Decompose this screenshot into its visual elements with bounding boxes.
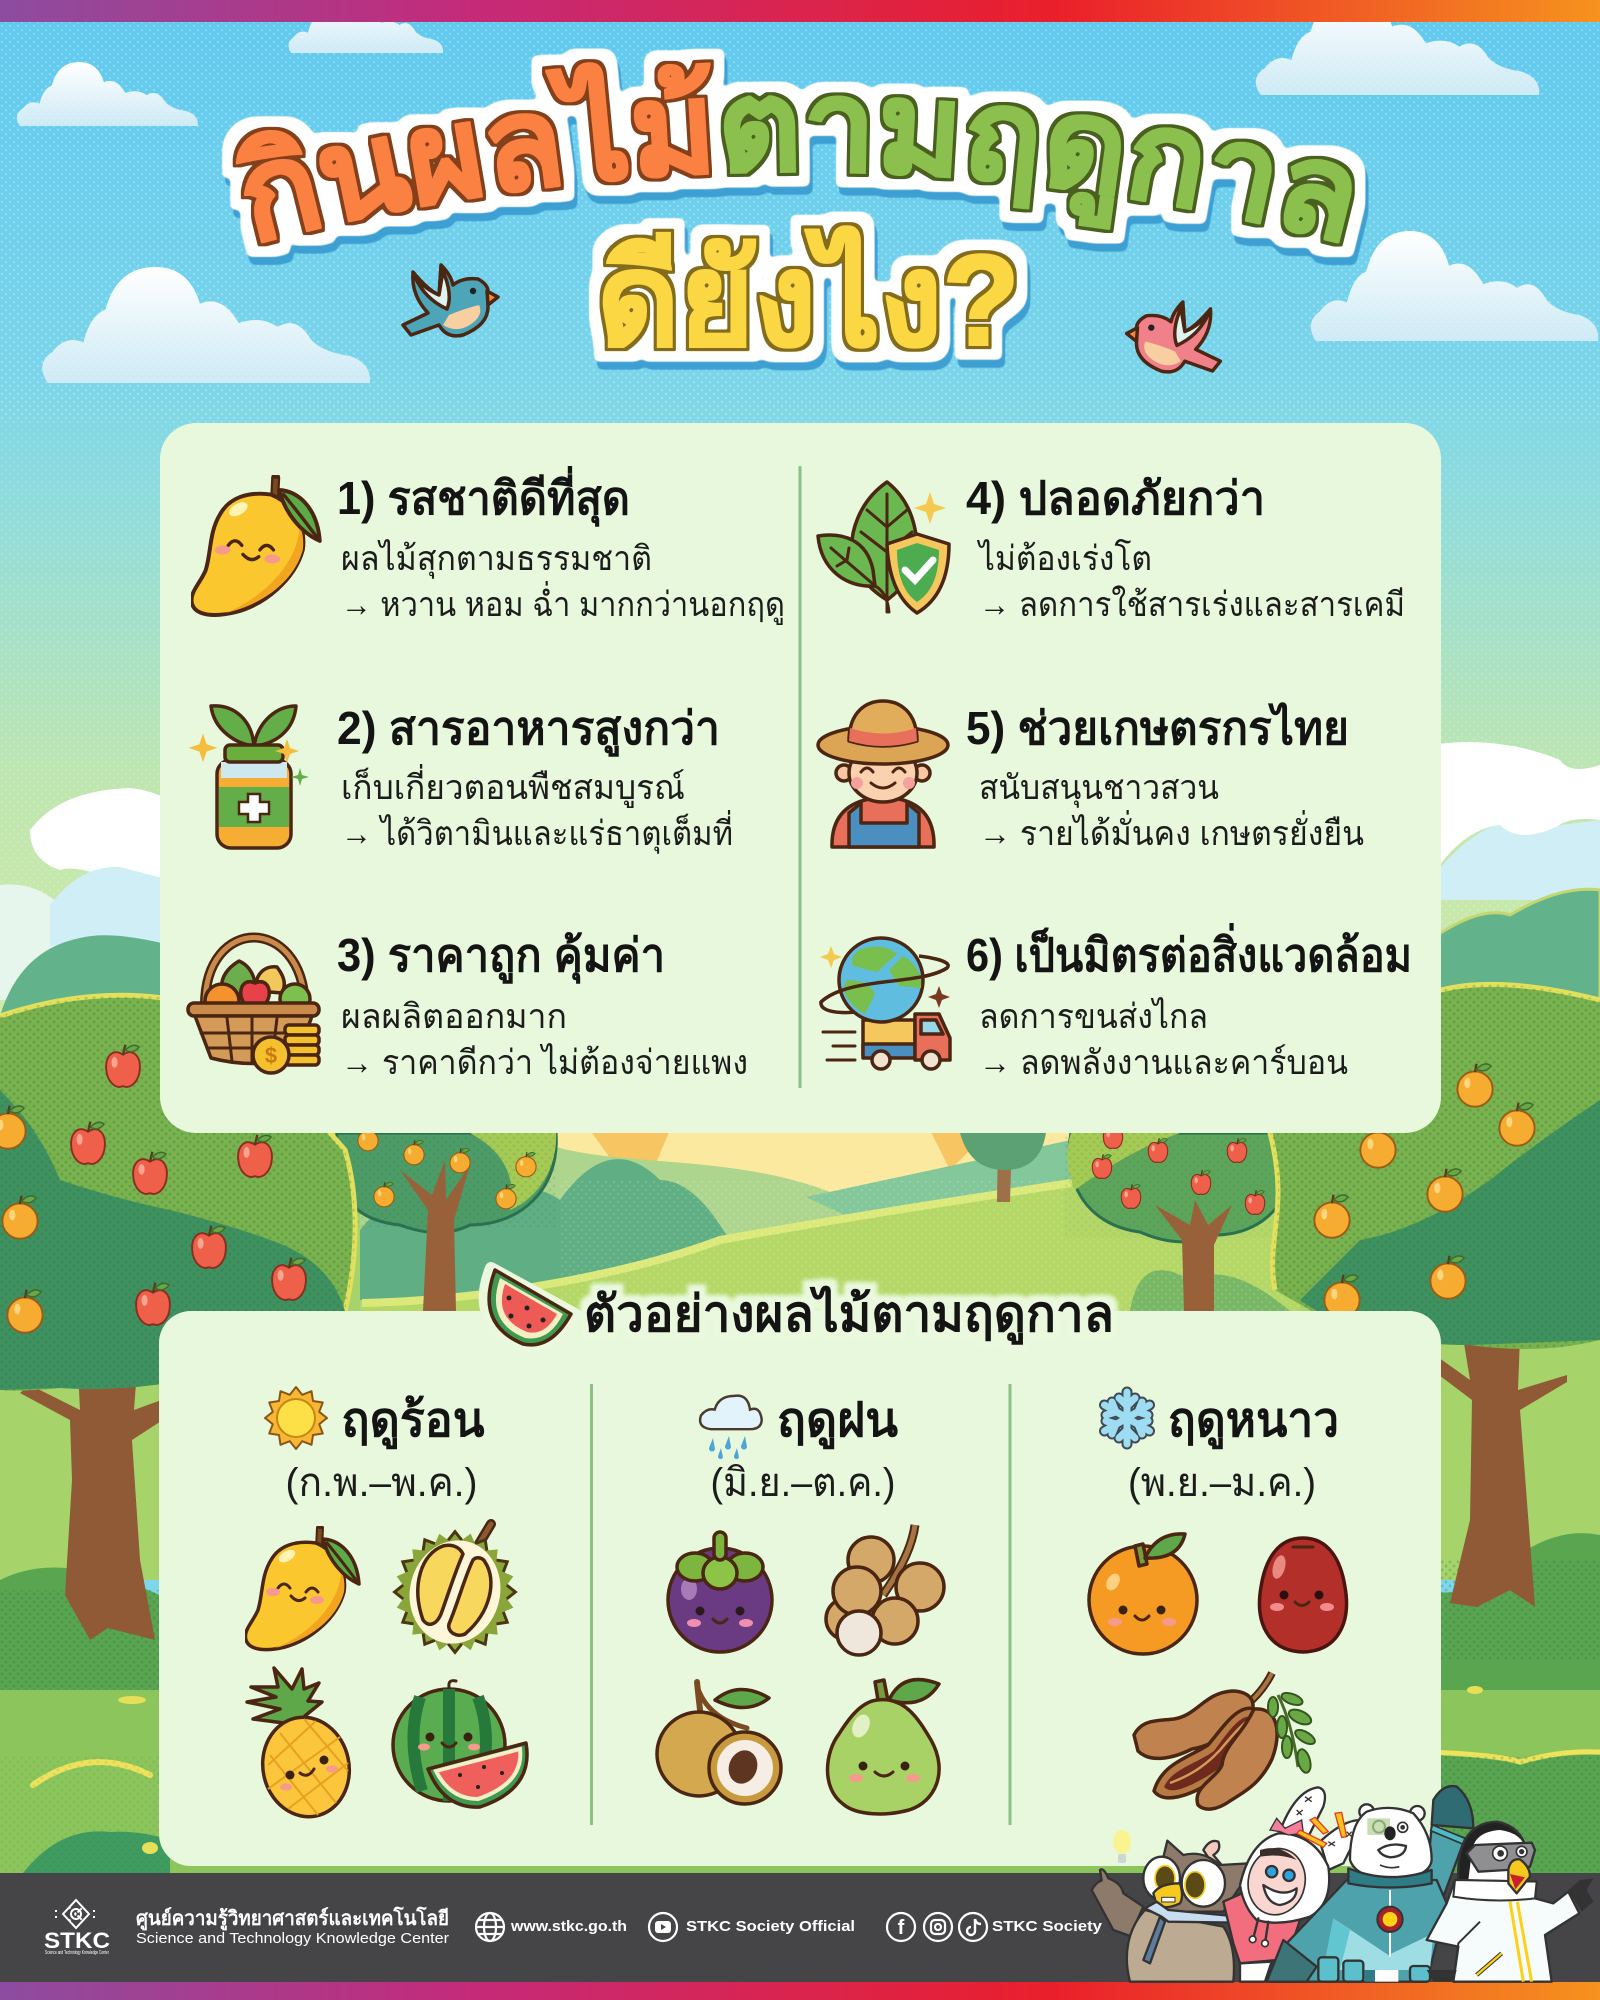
benefit 3: → ราคาดีกว่า ไม่ต้องจ่ายแพง [341, 1043, 748, 1082]
icon: farmer [818, 701, 948, 847]
footer organisation name: Science and Technology Knowledge Center [136, 1931, 449, 1947]
benefit 6: ลดการขนส่งไกล [979, 997, 1208, 1036]
benefit 4: 4) ปลอดภัยกว่า [966, 472, 1265, 524]
icon: mango [192, 478, 320, 615]
season heading: cold: ฤดูหนาว [1168, 1394, 1339, 1450]
benefit 5: → รายได้มั่นคง เกษตรยั่งยืน [979, 810, 1364, 853]
fruit: mangosteen [668, 1532, 772, 1652]
benefit 2 [337, 702, 733, 854]
panel: seasonal fruit examples [159, 1268, 1441, 1866]
icon: lightbulb [1113, 1830, 1131, 1863]
benefit 3: 3) ราคาถูก คุ้มค่า [337, 929, 665, 984]
icon: snowflake [1104, 1392, 1150, 1444]
benefit 2: 2) สารอาหารสูงกว่า [337, 702, 720, 757]
benefit 5 [966, 702, 1364, 853]
season heading: rainy: (มิ.ย.–ต.ค.) [710, 1461, 896, 1505]
distant clouds left [0, 788, 170, 1000]
small apple tree [1065, 1124, 1300, 1311]
benefit 4 [966, 472, 1405, 624]
benefit 4: → ลดการใช้สารเร่งและสารเคมี [979, 585, 1405, 624]
icon: web globe [476, 1913, 504, 1941]
top brand strip [0, 0, 1600, 22]
benefit 5: 5) ช่วยเกษตรกรไทย [966, 702, 1349, 754]
season heading: hot: ฤดูร้อน [342, 1394, 485, 1450]
benefit 3 [337, 929, 748, 1082]
icon: facebook: f [898, 1917, 905, 1939]
benefit 6: 6) เป็นมิตรต่อสิ่งแวดล้อม [966, 923, 1412, 981]
fruit: orange [1089, 1534, 1197, 1654]
icon: fruit basket [188, 938, 319, 1073]
small orange tree [336, 1126, 557, 1311]
benefit 6 [966, 923, 1412, 1082]
benefit 4: ไม่ต้องเร่งโต [976, 539, 1152, 578]
benefit 5: สนับสนุนชาวสวน [979, 769, 1219, 808]
footer organisation name [136, 1906, 449, 1947]
fruit: longkong [657, 1682, 781, 1804]
footer social name: STKC Society [992, 1918, 1103, 1935]
benefit 1: 1) รสชาติดีที่สุด [337, 466, 630, 527]
footer logo: Science and Technology Knowledge Center [45, 1950, 109, 1956]
meadow [0, 1050, 1600, 1880]
title arc path [252, 170, 1362, 247]
season heading: hot [286, 1394, 485, 1505]
footer bar [0, 1873, 1600, 1982]
benefit 6: → ลดพลังงานและคาร์บอน [979, 1044, 1348, 1082]
season heading: rainy: ฤดูฝน [777, 1394, 898, 1450]
season heading: hot: (ก.พ.–พ.ค.) [286, 1461, 478, 1505]
icon: video channel [649, 1913, 677, 1941]
mascot: rabbit [1223, 1787, 1360, 1982]
sun glow and hills [360, 1130, 1300, 1320]
fruit: watermelon [393, 1681, 527, 1807]
distant hills [0, 889, 1600, 1060]
season heading: cold: (พ.ย.–ม.ค.) [1128, 1461, 1316, 1505]
icon: facebook [887, 1913, 915, 1941]
icon: watermelon slice [485, 1268, 575, 1347]
benefit 1: → หวาน หอม ฉ่ำ มากกว่านอกฤดู [341, 581, 785, 625]
icon: vitamin jar [189, 706, 309, 848]
fruit: jujube [1260, 1538, 1346, 1652]
footer logo: STKC [44, 1928, 110, 1953]
fruit: mango [245, 1528, 359, 1650]
far tree [960, 1133, 1046, 1202]
icon: leaves and shield [818, 482, 949, 613]
fruit: pomelo [828, 1680, 939, 1814]
benefit 1: ผลไม้สุกตามธรรมชาติ [341, 539, 652, 579]
mascots [1092, 1786, 1593, 1982]
icon: fruit basket: $ [265, 1043, 277, 1068]
title: line 2: ดียังไง? [597, 226, 1020, 373]
fruit: longan cluster [826, 1525, 944, 1655]
clouds [0, 0, 1600, 422]
mascot: bear [1267, 1786, 1473, 1982]
large right tree [1270, 984, 1600, 1607]
icon: rain cloud [700, 1396, 762, 1459]
section heading: ตัวอย่างผลไม้ตามฤดูกาล [584, 1285, 1114, 1345]
mascot: penguin [1427, 1822, 1593, 1982]
icon: sun [265, 1387, 327, 1449]
foreground grass and bushes [0, 1686, 1600, 1873]
bottom brand strip [0, 1982, 1600, 2000]
fruit: durian [381, 1518, 529, 1666]
icon: pink bird [1127, 302, 1220, 372]
icon: instagram [924, 1913, 952, 1941]
icon: tiktok [959, 1913, 987, 1941]
benefit 1 [337, 466, 785, 625]
mascot: owl [1092, 1841, 1250, 1982]
footer logo [44, 1900, 110, 1956]
season heading: rainy [710, 1394, 898, 1505]
season heading: cold [1128, 1394, 1339, 1505]
footer channel name: STKC Society Official [686, 1918, 855, 1935]
benefit 2: เก็บเกี่ยวตอนพืชสมบูรณ์ [341, 764, 685, 808]
footer website: www.stkc.go.th [510, 1918, 627, 1935]
benefit 2: → ได้วิตามินและแร่ธาตุเต็มที่ [341, 810, 733, 854]
distant clouds right [1430, 742, 1600, 900]
footer organisation name: ศูนย์ความรู้วิทยาศาสตร์และเทคโนโลยี [136, 1906, 449, 1932]
fruit: tamarind [1134, 1673, 1317, 1809]
panel: benefits [160, 423, 1441, 1133]
benefit 3: ผลผลิตออกมาก [341, 998, 567, 1036]
icon: globe and truck [820, 938, 950, 1069]
icon: blue bird [403, 265, 498, 336]
large left tree [0, 995, 355, 1640]
fruit: pineapple [247, 1668, 358, 1825]
title: line 1: กินผลไม้ตามฤดูกาล [222, 48, 1369, 266]
